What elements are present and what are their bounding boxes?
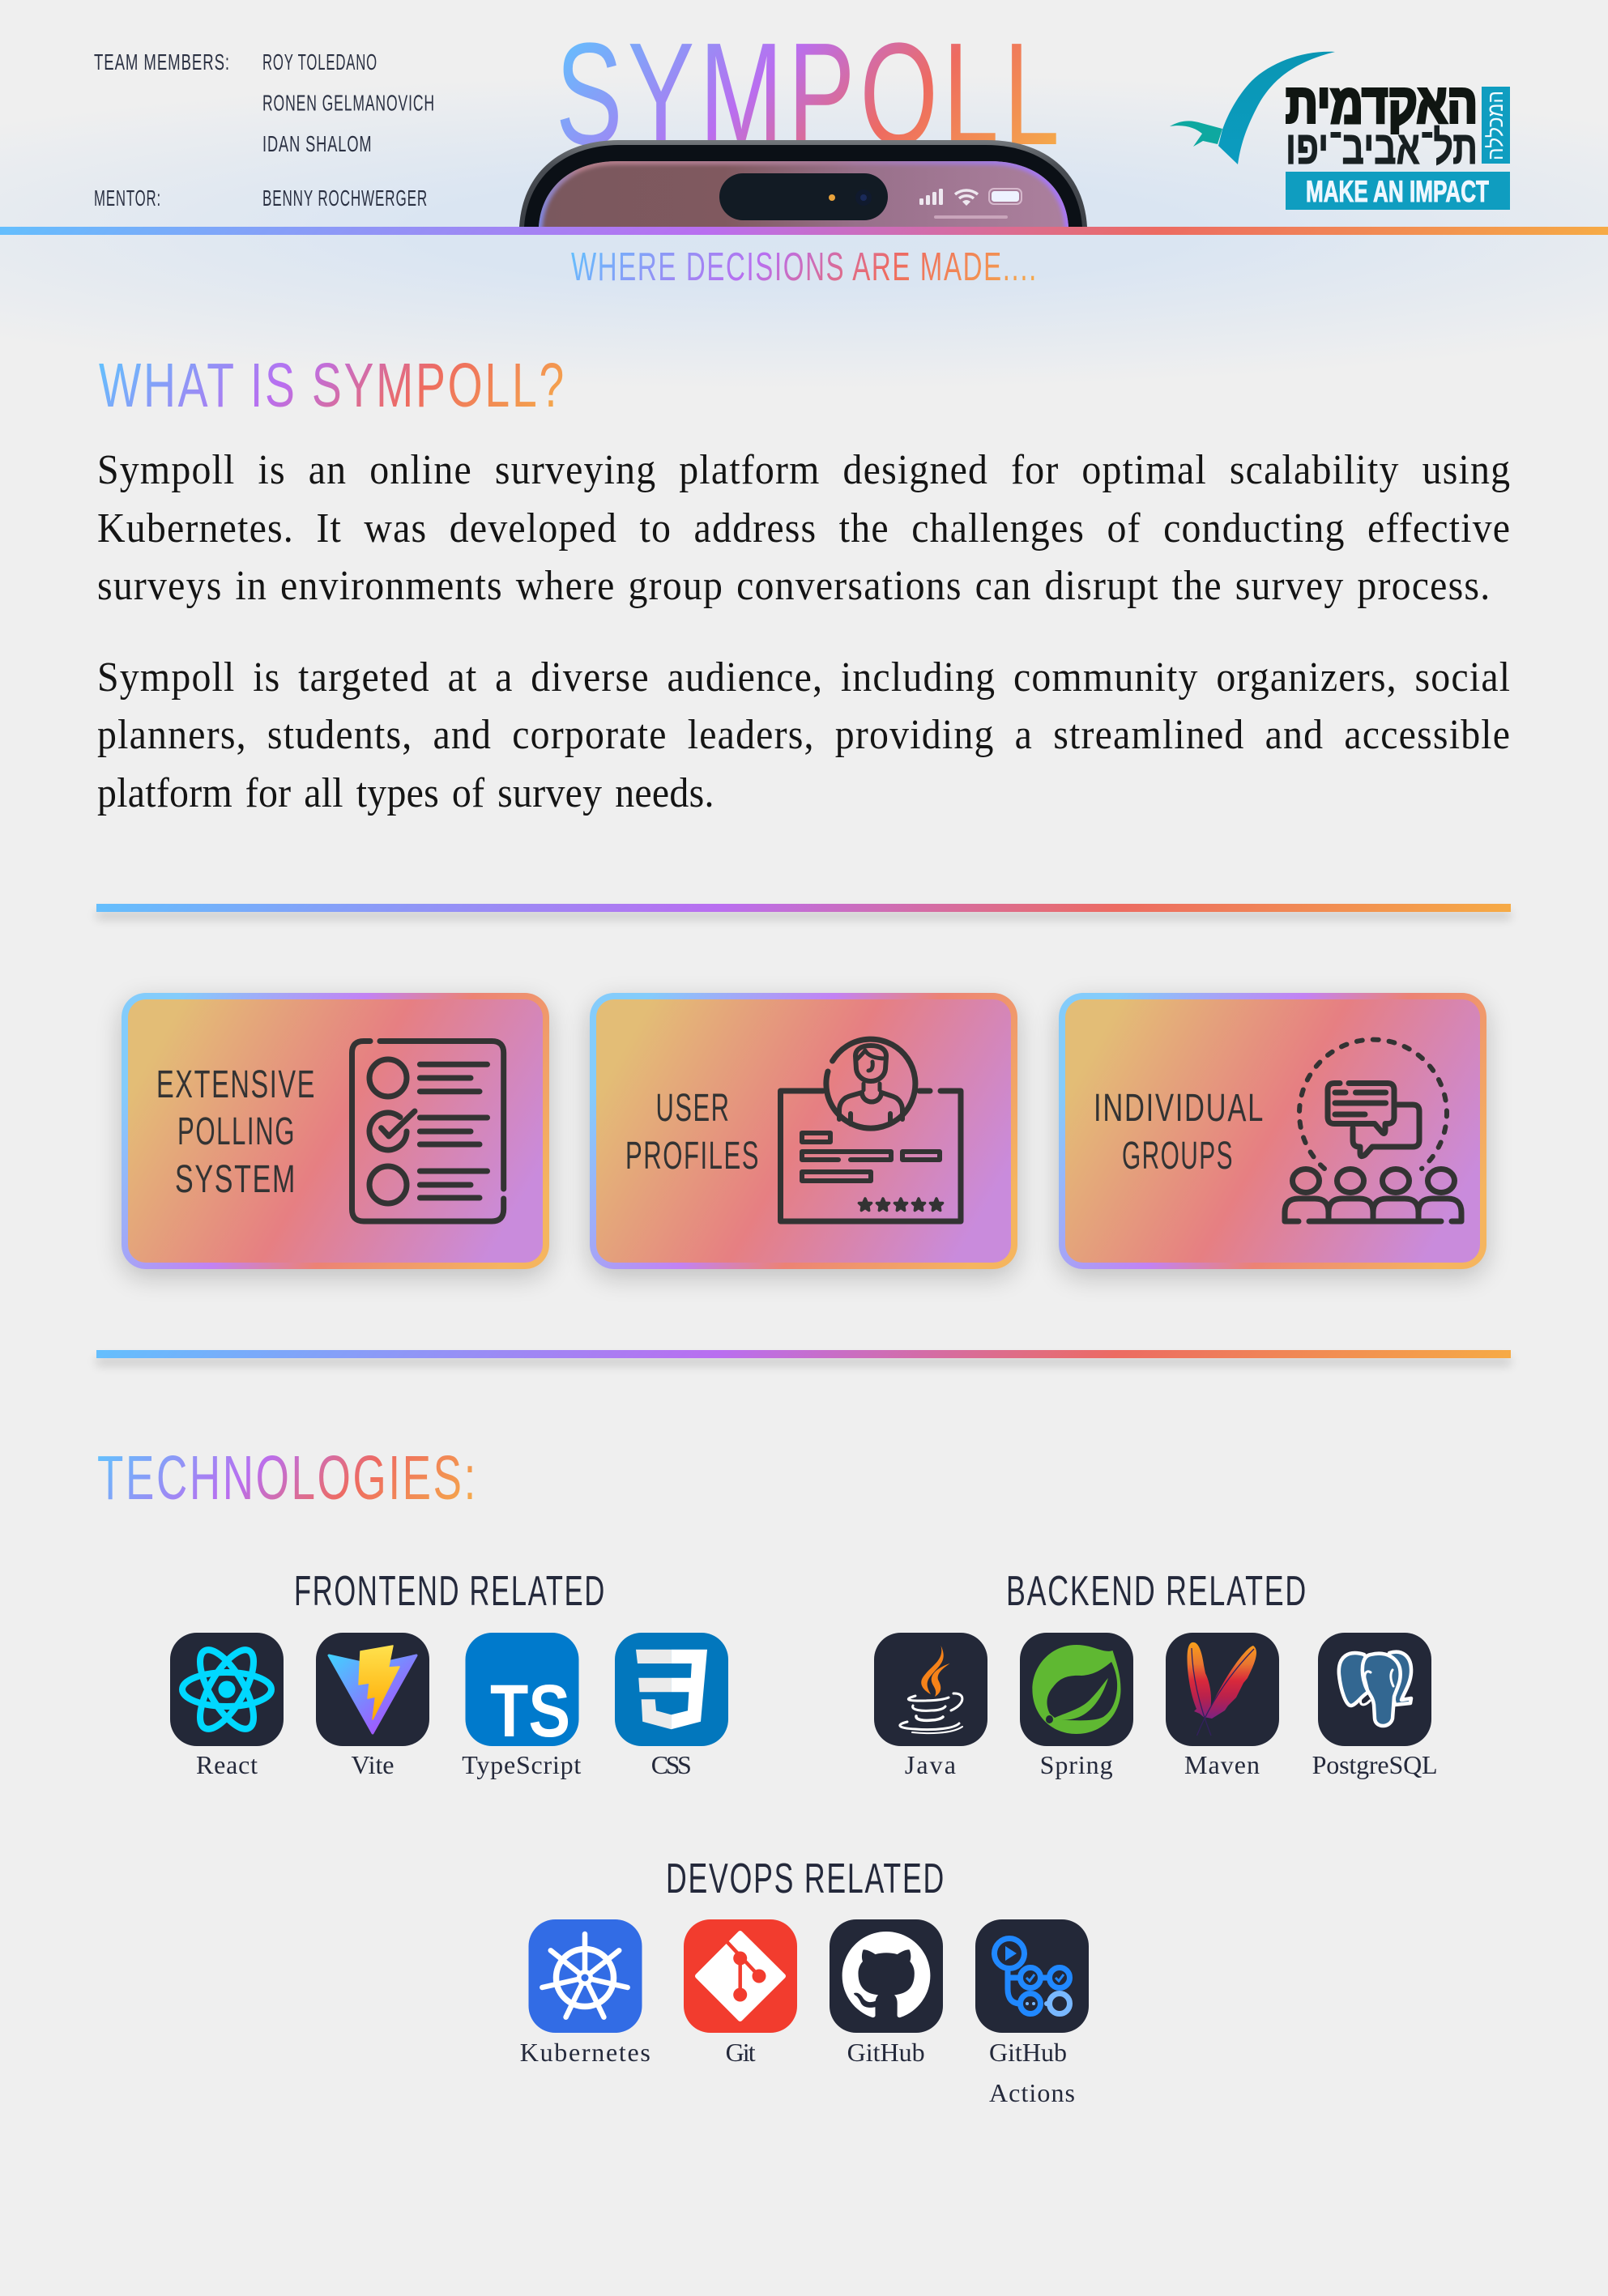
- label: kubernetes: Kubernetes: [520, 2038, 650, 2067]
- divider: [96, 1350, 1511, 1358]
- team members: RONEN GELMANOVICH: [262, 91, 435, 116]
- card text: POLLING: [177, 1110, 296, 1153]
- icon: group discussion: [1285, 1040, 1461, 1221]
- team members: ROY TOLEDANO: [262, 49, 377, 75]
- phone mockup: [519, 140, 1087, 230]
- header background glow: [0, 0, 1608, 405]
- tagline: WHERE DECISIONS ARE MADE....: [571, 245, 1038, 289]
- icon: kubernetes: [528, 1919, 642, 2033]
- side label: המכללה: [1483, 91, 1508, 160]
- panel: extensive polling system: [122, 993, 549, 1269]
- label: git: Git: [726, 2038, 756, 2067]
- label: postgresql: PostgreSQL: [1312, 1750, 1438, 1779]
- title: SYMPOLL: [556, 13, 1064, 176]
- icon: checklist: [352, 1042, 504, 1221]
- paragraph 1: Sympoll is an online surveying platform designed for optimal scalability using: [97, 447, 1511, 493]
- label: maven: Maven: [1184, 1750, 1260, 1779]
- label: typescript: TypeScript: [462, 1750, 581, 1779]
- card text: USER: [656, 1087, 731, 1130]
- hebrew college name: תל־אביב־יפו: [1286, 121, 1478, 174]
- card text: EXTENSIVE: [156, 1063, 316, 1106]
- label: github actions: [989, 2038, 1075, 2107]
- panel: user profiles: [590, 993, 1017, 1269]
- status icons: [919, 189, 1022, 219]
- label: react: React: [196, 1750, 258, 1779]
- mentor: [94, 185, 428, 211]
- heading: frontend related: FRONTEND RELATED: [294, 1568, 606, 1615]
- paragraph 2: planners, students, and corporate leaders, providing a streamlined and accessible: [97, 712, 1511, 758]
- team members: [94, 49, 435, 156]
- card text: [625, 1087, 760, 1178]
- icon: postgresql: [1318, 1633, 1431, 1746]
- college logo: [1170, 52, 1510, 210]
- heading: devops related: DEVOPS RELATED: [666, 1855, 945, 1902]
- panel: individual groups: [1059, 993, 1486, 1269]
- impact banner: [1286, 172, 1510, 210]
- card text: SYSTEM: [175, 1158, 296, 1201]
- label: vite: Vite: [352, 1750, 394, 1779]
- icon: vite: [316, 1633, 429, 1746]
- label: spring: Spring: [1040, 1750, 1113, 1779]
- label: java: Java: [905, 1750, 956, 1779]
- label: github actions: GitHub: [989, 2038, 1067, 2067]
- paragraph 1: surveys in environments where group conversations can disrupt the survey process.: [97, 563, 1491, 609]
- dynamic island: [719, 173, 888, 220]
- card text: PROFILES: [625, 1135, 760, 1178]
- icon: react: [170, 1633, 284, 1746]
- paragraph 2: Sympoll is targeted at a diverse audience, including community organizers, social: [97, 654, 1511, 701]
- hebrew college name: [1286, 73, 1478, 174]
- paragraph 2: platform for all types of survey needs.: [97, 770, 714, 816]
- heading: backend related: BACKEND RELATED: [1006, 1568, 1307, 1615]
- icon: maven: [1166, 1633, 1279, 1746]
- paragraph 1: Kubernetes. It was developed to address the challenges of conducting effective: [97, 505, 1511, 552]
- divider: [96, 904, 1511, 912]
- icon: github actions: [975, 1919, 1089, 2033]
- checkmark: [1170, 52, 1335, 164]
- icon: user profile card: [781, 1039, 961, 1221]
- card text: GROUPS: [1122, 1135, 1234, 1178]
- card text: INDIVIDUAL: [1094, 1087, 1265, 1130]
- team members: IDAN SHALOM: [262, 131, 373, 156]
- technologies section: [97, 1443, 1438, 2107]
- icon: typescript: [465, 1633, 578, 1753]
- label: css: CSS: [651, 1750, 692, 1779]
- header artwork: [94, 13, 1510, 289]
- icon: css: [615, 1633, 728, 1746]
- icon: typescript: TS: [490, 1670, 570, 1753]
- label: github: GitHub: [847, 2038, 925, 2067]
- icon: java: [874, 1633, 987, 1746]
- label: github actions: Actions: [989, 2078, 1075, 2107]
- icon: spring: [1020, 1633, 1133, 1746]
- mentor: BENNY ROCHWERGER: [262, 185, 428, 211]
- icon: github: [830, 1919, 943, 2033]
- mentor: MENTOR:: [94, 185, 161, 211]
- icon: rating stars: [859, 1199, 943, 1210]
- heading: technologies: TECHNOLOGIES:: [97, 1443, 478, 1513]
- icon: git: [684, 1919, 797, 2033]
- paragraph 2: [97, 654, 1511, 816]
- header gradient bar: [0, 227, 1608, 235]
- card text: [1094, 1087, 1265, 1178]
- paragraph 1: [97, 447, 1511, 609]
- hebrew college name: האקדמית: [1286, 73, 1478, 134]
- card text: [156, 1063, 316, 1201]
- impact banner: MAKE AN IMPACT: [1306, 175, 1489, 208]
- team members: TEAM MEMBERS:: [94, 49, 230, 75]
